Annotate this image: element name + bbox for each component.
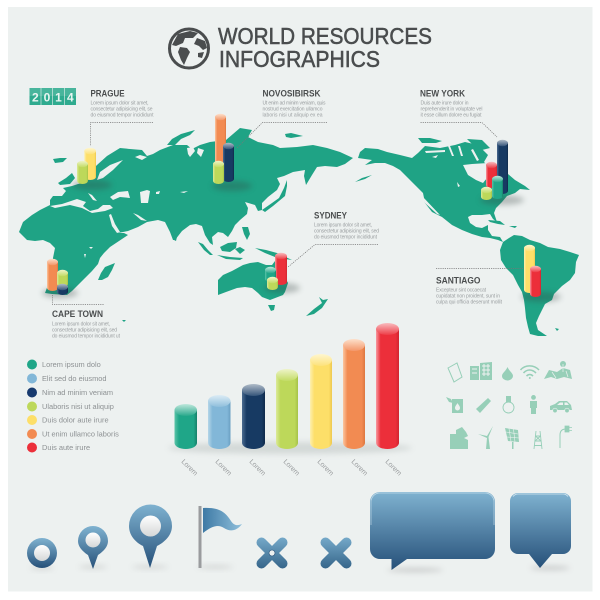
callout: Cape Town: Lorem ipsum dolor sit amet, <box>52 322 110 328</box>
icon: transmission tower <box>534 431 542 449</box>
callout: New York: Duis aute irure dolor in <box>420 100 469 106</box>
callout: Santiago <box>436 268 523 306</box>
icon: plug <box>560 426 572 448</box>
bar: red <box>376 323 399 449</box>
North America landmass <box>358 142 530 242</box>
islands of Europe <box>58 173 75 185</box>
callout: Prague: PRAGUE <box>90 88 124 98</box>
Hudson Bay and inland water <box>423 146 499 215</box>
icon: fuel can <box>446 397 463 413</box>
callout: Novosibirsk: NOVOSIBIRSK <box>262 88 321 98</box>
icon: globe <box>170 29 208 68</box>
Tasmania <box>268 305 275 311</box>
year counter 2014: 2 <box>32 90 39 104</box>
callout: Santiago: culpa qui officia deserunt mollit <box>436 300 503 306</box>
legend item: green: Ulaboris nisi ut aliquip <box>42 402 114 411</box>
icon: wifi <box>520 366 539 379</box>
title text: INFOGRAPHICS <box>219 46 380 72</box>
icon: water drop <box>502 367 513 380</box>
speech bubble: wide <box>370 492 495 572</box>
callout: Santiago: SANTIAGO <box>436 276 480 286</box>
callout: Novosibirsk: nostrud exercitation ullamco <box>262 106 323 112</box>
callout: Santiago: cupidatat non proident, sunt in <box>436 294 500 300</box>
callout: Sydney: SYDNEY <box>314 210 347 220</box>
callout: Cape Town: do eiusmod tempor incididunt ut <box>52 334 121 340</box>
callout: Novosibirsk: Ut enim ad minim veniam, quis <box>262 100 326 106</box>
callout: Cape Town: consectetur adipisicing elit, sed <box>52 328 117 334</box>
year counter 2014: 0 <box>44 90 51 104</box>
Madagascar <box>98 263 115 280</box>
callout: Prague: do eiusmod tempor incididunt <box>90 112 154 118</box>
year counter 2014: 1 <box>55 90 62 104</box>
small Indian Ocean island <box>122 320 126 322</box>
map cylinders: Prague <box>77 148 96 184</box>
bar labels: Lorem <box>214 458 233 478</box>
icon: wind turbine <box>478 426 493 449</box>
New Zealand <box>306 297 328 316</box>
legend item: red: Duis aute irure <box>42 443 90 452</box>
world map <box>19 128 579 336</box>
seas <box>50 147 204 258</box>
bar labels: Lorem <box>316 458 335 478</box>
title block <box>170 23 432 72</box>
title text: WORLD RESOURCES <box>218 23 432 49</box>
islands of Asia and Oceania <box>198 242 213 255</box>
callout: Prague: Lorem ipsum dolor sit amet, <box>90 100 148 106</box>
map cylinders: Sydney <box>265 253 287 290</box>
flag <box>197 506 242 568</box>
legend item: navy: Nim ad minim veniam <box>42 388 113 397</box>
Eurasia and Africa landmass <box>19 128 353 295</box>
callout: Sydney <box>288 210 379 267</box>
islands of Arctic Russia <box>285 133 303 138</box>
bar: light blue <box>208 395 230 449</box>
Arctic islands <box>418 138 490 150</box>
map cylinders: Santiago <box>524 245 541 297</box>
map cylinders: Novosibirsk <box>213 114 234 184</box>
callout: New York <box>420 88 497 137</box>
callout: Santiago: Excepteur sint occaecat <box>436 288 487 294</box>
icon: phone <box>448 363 462 382</box>
year counter 2014: 4 <box>67 90 74 104</box>
cross with hole <box>262 542 282 564</box>
3D bar chart <box>168 323 412 478</box>
callout: Novosibirsk <box>237 88 327 148</box>
bar: teal <box>174 404 197 449</box>
icon: person <box>530 395 537 414</box>
South America landmass <box>500 235 579 336</box>
callout: Cape Town: CAPE TOWN <box>52 309 103 319</box>
icon: map with pin <box>544 361 572 379</box>
callout: Novosibirsk: laboris nisi ut aliquip ex ea <box>262 112 323 118</box>
map cylinders: New York <box>481 140 508 200</box>
legend <box>27 360 119 452</box>
callout: Sydney: consectetur adipisicing elit, sed <box>314 228 379 234</box>
icon: solar panel <box>505 428 519 449</box>
icon: car <box>550 401 572 413</box>
bar: orange <box>343 339 365 449</box>
bar: green <box>276 369 298 449</box>
bar: navy <box>242 384 265 449</box>
legend item: light blue: Elit sed do eiusmod <box>42 374 106 383</box>
callout: New York: NEW YORK <box>420 88 465 98</box>
bar labels: Lorem <box>384 458 403 478</box>
callout: Prague: consectetur adipisicing elit, se <box>90 106 153 112</box>
Australia <box>218 261 288 300</box>
callout: New York: reprehenderit in voluptate vel <box>420 106 482 112</box>
bar labels: Lorem <box>248 458 267 478</box>
map pin: small <box>78 526 108 569</box>
map pin: round <box>27 538 57 570</box>
callout: Sydney: do eiusmod tempor incididunt <box>314 234 378 240</box>
Falkland islands <box>555 328 559 331</box>
speech bubble: square <box>510 493 571 570</box>
cross <box>326 542 346 564</box>
icon: light bulb <box>503 396 514 413</box>
bar labels: Lorem <box>180 458 199 478</box>
map pin: large <box>129 504 172 568</box>
cylinder shadows on map <box>42 180 561 302</box>
Caribbean islands <box>488 220 517 228</box>
callout: New York: it esse cillum dolore eu fugiat <box>420 112 482 118</box>
callout: Cape Town <box>52 295 121 340</box>
bar labels <box>180 458 403 478</box>
icon: CFL lamp <box>476 398 491 413</box>
resource icons grid <box>446 361 572 449</box>
icon: factory <box>450 427 468 449</box>
map cylinders: Cape Town <box>47 259 68 295</box>
title text <box>218 23 432 72</box>
legend item: yellow: Duis dolor aute irure <box>42 416 109 424</box>
bar labels: Lorem <box>350 458 369 478</box>
Aleutian chain <box>355 175 372 182</box>
icon: buildings <box>470 362 492 380</box>
legend item: orange: Ut enim ullamco laboris <box>42 430 119 438</box>
callout: Prague <box>90 88 154 146</box>
callout: Sydney: Lorem ipsum dolor sit amet, <box>314 222 372 228</box>
bar: yellow <box>310 354 332 449</box>
legend item: teal: Lorem ipsum dolo <box>42 360 101 369</box>
year counter 2014 <box>30 88 76 105</box>
bar labels: Lorem <box>282 458 301 478</box>
